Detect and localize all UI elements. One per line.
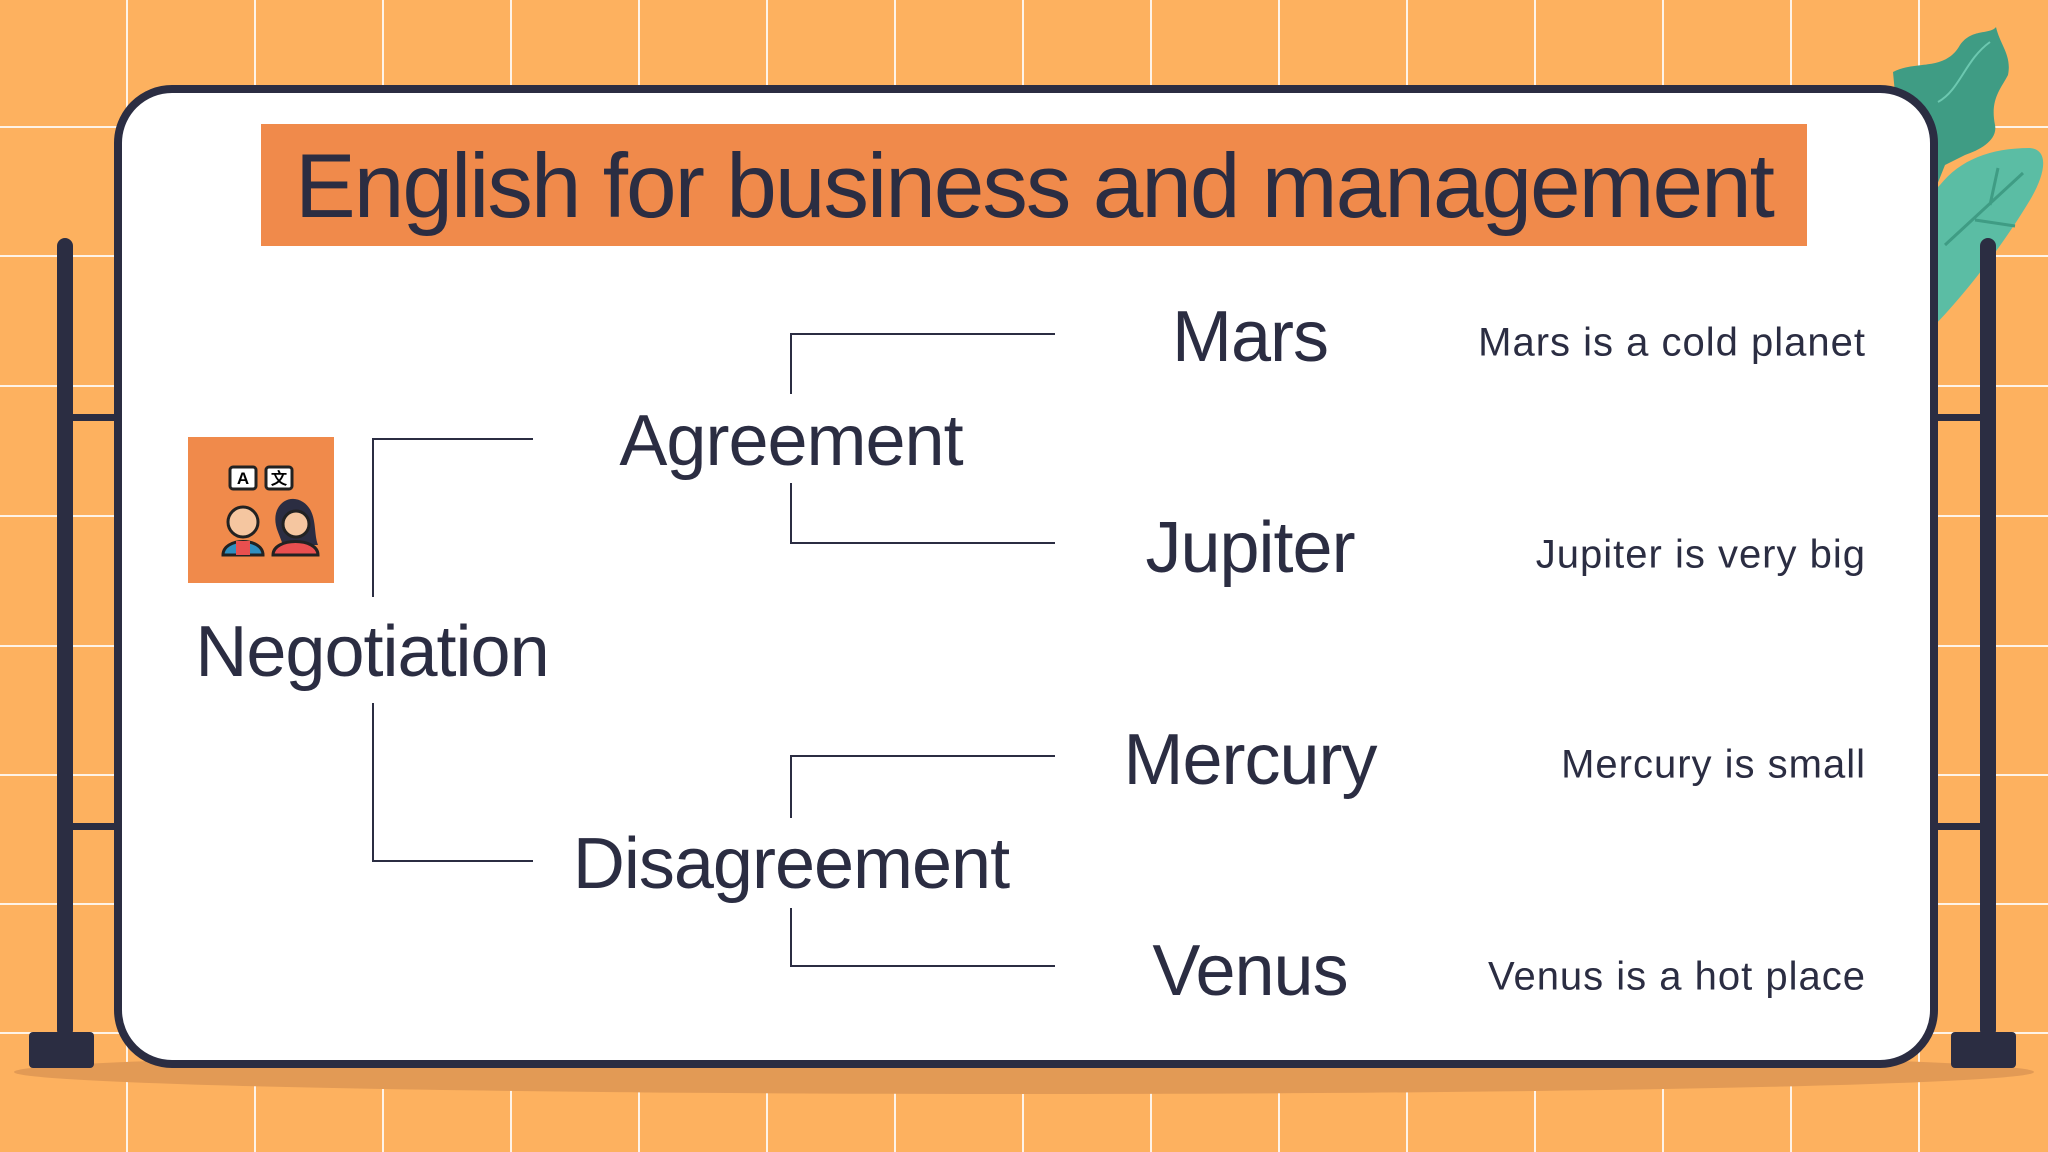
- icon: negotiation people: A: [237, 469, 249, 488]
- desc: Venus: Venus is a hot place: [1488, 954, 1866, 998]
- icon: negotiation people: [188, 437, 334, 583]
- icon: negotiation people: 文: [271, 469, 288, 488]
- leaf: Mercury: Mercury: [1123, 720, 1377, 800]
- shadow: [14, 1050, 2034, 1094]
- card: [114, 85, 1938, 1068]
- leaf: Mars: Mars: [1172, 297, 1328, 377]
- node: Disagreement: Disagreement: [573, 824, 1009, 904]
- node: Agreement: Agreement: [619, 401, 963, 481]
- title: English for business and management: [295, 136, 1773, 237]
- leaf: Venus: Venus: [1152, 931, 1348, 1011]
- leaf: Jupiter: Jupiter: [1145, 508, 1355, 588]
- node: Negotiation: Negotiation: [195, 612, 549, 692]
- desc: Mars: Mars is a cold planet: [1478, 320, 1866, 364]
- desc: Mercury: Mercury is small: [1561, 742, 1866, 786]
- desc: Jupiter: Jupiter is very big: [1536, 532, 1866, 576]
